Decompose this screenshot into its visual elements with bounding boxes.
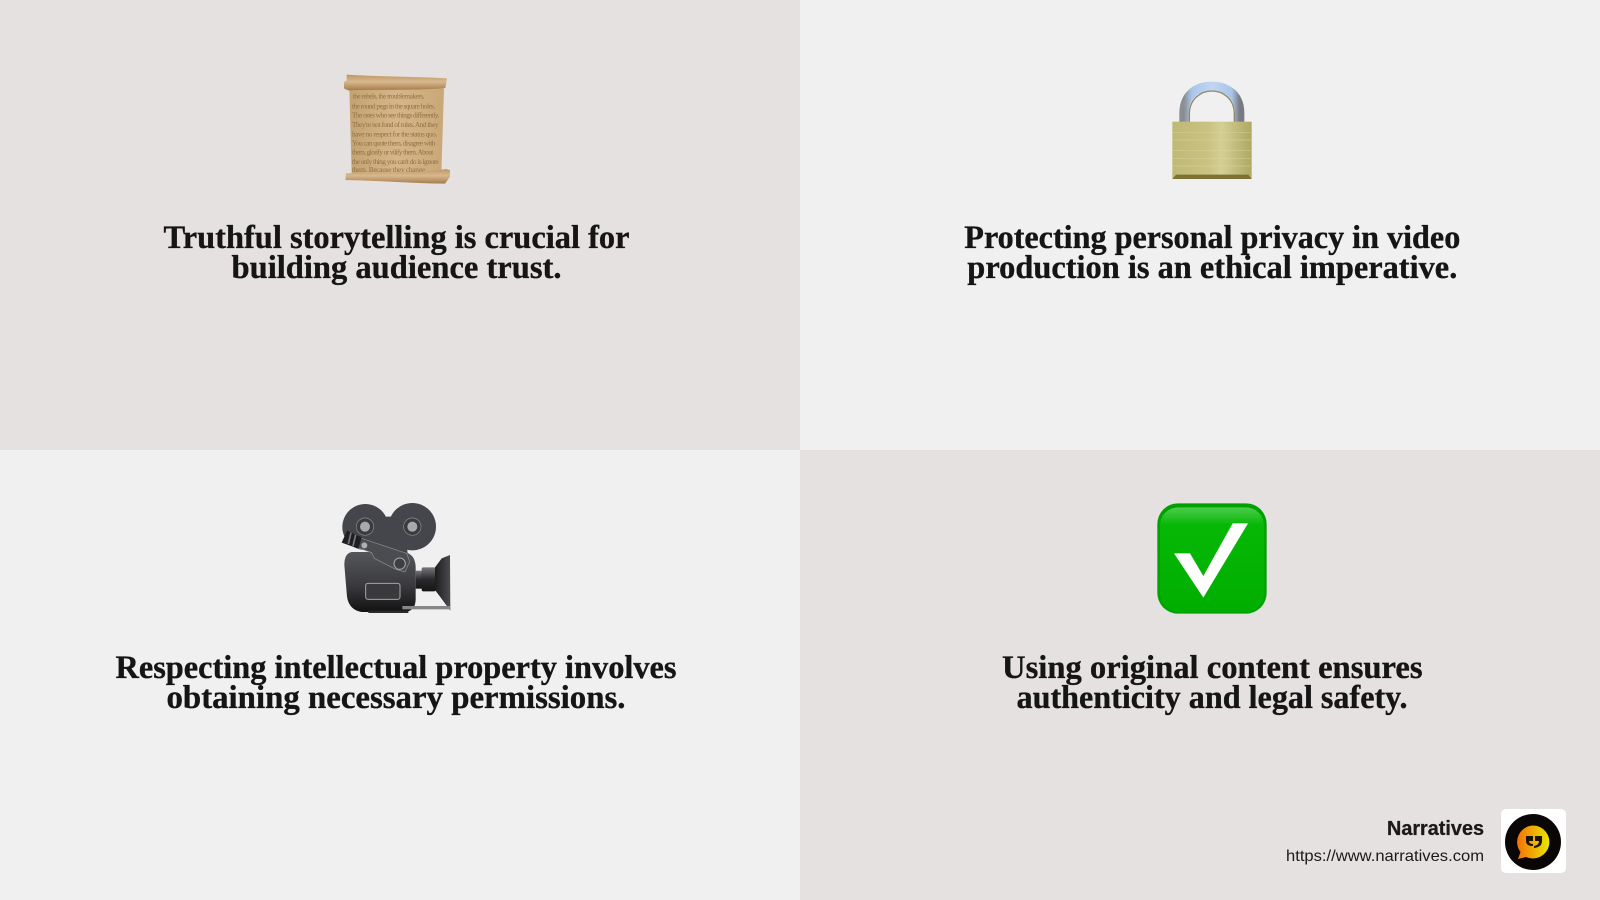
icon: scroll: have no respect for the status quo.: [352, 129, 437, 138]
heading: truthful storytelling: [164, 220, 630, 286]
brand name and url: [1286, 818, 1484, 865]
icon: scroll: the round pegs in the square holes.: [352, 102, 435, 111]
heading: personal privacy: Protecting personal privacy in video: [964, 220, 1460, 256]
icon: scroll: them, glorify or vilify them. About: [352, 148, 433, 157]
panel: personal privacy: [800, 0, 1600, 450]
icon: scroll: [344, 75, 450, 184]
icon: narratives logo: [1501, 809, 1566, 873]
brand name and url: https://www.narratives.com: [1286, 848, 1484, 865]
icon: scroll: the only thing you can't do is ignore: [352, 157, 439, 166]
heading: truthful storytelling: building audience trust.: [232, 250, 562, 286]
icon: scroll: them. Because they change: [352, 165, 425, 174]
icon: padlock: [1172, 86, 1252, 179]
icon: check mark: [1157, 503, 1267, 614]
panel: truthful storytelling: [0, 0, 800, 450]
brand name and url: Narratives: [1387, 818, 1484, 840]
heading: original content: [1002, 650, 1423, 716]
icon: scroll: They're not fond of rules. And they: [352, 120, 439, 129]
heading: personal privacy: [964, 220, 1460, 286]
heading: truthful storytelling: Truthful storytelling is crucial for: [164, 220, 630, 256]
panel: original content: [800, 450, 1600, 900]
panel: intellectual property: [0, 450, 800, 900]
icon: scroll: the rebels, the troublemakers,: [353, 92, 424, 101]
icon: movie camera: [342, 503, 450, 613]
heading: intellectual property: Respecting intellectual property involves: [116, 650, 677, 686]
heading: personal privacy: production is an ethical imperative.: [967, 250, 1457, 286]
heading: original content: authenticity and legal safety.: [1016, 680, 1408, 716]
heading: original content: Using original content ensures: [1002, 650, 1423, 686]
heading: intellectual property: obtaining necessary permissions.: [166, 680, 626, 716]
icon: scroll: The ones who see things differently.: [352, 111, 439, 120]
icon: scroll: You can quote them, disagree with: [352, 138, 436, 147]
heading: intellectual property: [116, 650, 677, 716]
